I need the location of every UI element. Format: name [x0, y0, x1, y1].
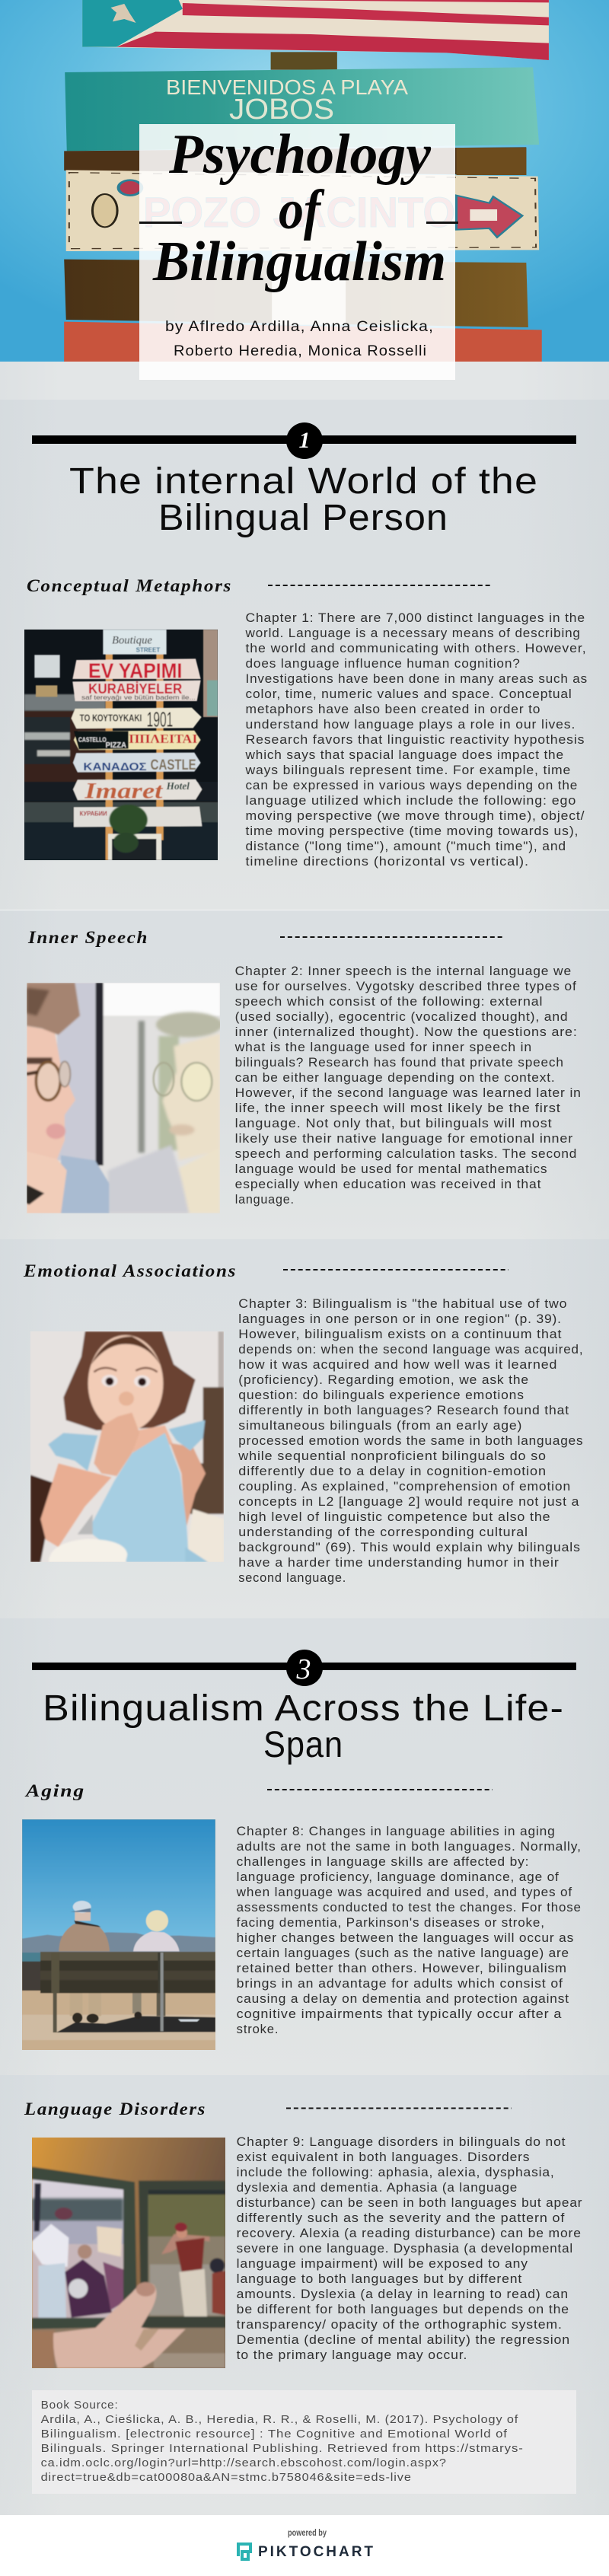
text: chapter 8: stroke. [237, 2023, 279, 2036]
text: chapter 3: concepts in L2 [language 2] would require not just a [238, 1495, 579, 1509]
icon: Piktochart logo [238, 2544, 250, 2559]
photo: stack of street signs: KURABİYELER [88, 681, 183, 697]
section 1 divider with number [32, 422, 576, 459]
icon: Puerto Rico flag sign [82, 0, 549, 60]
text: chapter 9: language impairment) will be exposed to any [237, 2257, 528, 2271]
text: chapter 2: language would be used for mental mathematics [235, 1162, 547, 1176]
text: chapter 1: time moving perspective (time moving towards us), [245, 824, 579, 838]
section 3 heading [43, 1688, 564, 1765]
photo: stack of street signs: Boutique [112, 634, 152, 646]
text: chapter 3: Chapter 3: Bilingualism is "the habitual use of two [238, 1297, 567, 1311]
text: chapter 3: languages in one person or in one region" (p. 39). [238, 1312, 562, 1326]
text: chapter 1: color, time, numeric values and space. Conceptual [245, 687, 572, 701]
text: chapter 1: ways bilinguals represent time. For example, time [244, 764, 571, 777]
text: chapter 2: what is the language used for inner speech in [234, 1041, 532, 1054]
text: chapter 9: dyslexia and dementia. Aphasia (a language [237, 2181, 518, 2195]
icon: post [271, 52, 337, 70]
text: chapter 2: use for ourselves. Vygotsky described three types of [235, 980, 577, 993]
text: chapter 2: life, the inner speech will most likely be the first [235, 1101, 561, 1115]
citation text: Bilingualism. [electronic resource] : The Cognitive and Emotional World of [41, 2428, 508, 2441]
text: chapter 2: speech which consist of the following: external [235, 995, 543, 1009]
text: chapter 2: language. Not only that, but bilinguals will most [235, 1117, 553, 1130]
text: chapter 3: question: do bilinguals experience emotions [238, 1388, 525, 1402]
title: Psychology of Bilingualism: Psychology [168, 123, 432, 186]
section 1 heading: The internal World of the [69, 461, 538, 502]
text: chapter 8: cognitive impairments that typically occur after a [237, 2007, 562, 2021]
text: chapter 3: how it was acquired and how well was it learned [238, 1358, 557, 1372]
photo: stack of street signs: КУРАБИИ [80, 809, 107, 817]
title card [139, 123, 458, 380]
section 1 heading [69, 461, 538, 538]
text: chapter 8: causing a delay on dementia and protection against [237, 1992, 569, 2006]
text: chapter 9: to the primary language may occur. [237, 2348, 467, 2362]
text: chapter 8: assessments conducted to test the changes. For those [237, 1901, 582, 1914]
photo: person and reflection in window [27, 983, 220, 1213]
text: chapter 9: Chapter 9: Language disorders in bilinguals do not [237, 2135, 566, 2149]
text: chapter 8: Chapter 8: Changes in language abilities in aging [237, 1825, 556, 1838]
text: chapter 3 [238, 1297, 583, 1585]
photo: hand holding family photo frames [32, 2138, 225, 2368]
text: chapter 9: be different for both languages but depends on the [237, 2303, 569, 2316]
text: chapter 3: (proficiency). Regarding emotion, we ask the [238, 1373, 529, 1387]
subheading: Aging: Aging [24, 1781, 85, 1800]
text: chapter 2: (used socially), egocentric (vocalized thought), and [235, 1010, 568, 1024]
footer [0, 2515, 609, 2576]
text: chapter 3: processed emotion words the same in both languages [238, 1434, 583, 1448]
text: chapter 1: the world and communicating with others. However, [245, 642, 586, 655]
photo: stack of street signs: CASTLE [151, 757, 196, 773]
section 3 heading: Bilingualism Across the Life- [43, 1688, 564, 1729]
icon: brown plank [64, 147, 526, 175]
section 1 divider with number: 1 [298, 428, 311, 453]
title: Psychology of Bilingualism: of [279, 179, 325, 241]
hero photo: painted wooden signs against blue sky: POZO JACINTO [143, 188, 455, 236]
text: chapter 1: timeline directions (horizontal vs vertical). [245, 855, 529, 869]
text: chapter 9: recovery. Alexia (a reading disturbance) can be more [237, 2227, 582, 2240]
text: chapter 1: Chapter 1: There are 7,000 distinct languages in the [245, 611, 585, 625]
text: chapter 9: language to both languages but by different [237, 2272, 522, 2286]
text: chapter 2 [234, 964, 582, 1207]
text: chapter 8: language proficiency, language dominance, age of [237, 1870, 560, 1884]
authors [165, 319, 434, 359]
photo: stack of street signs: Imaret [84, 779, 163, 804]
text: chapter 1: understand how language plays a role in our lives. [245, 718, 576, 732]
Piktochart wordmark: PIKTOCHART [258, 2544, 373, 2560]
text: chapter 9: severe in one language. Dysphasia (a developmental [237, 2242, 573, 2256]
text: chapter 8: brings in an advantage for adults which consist of [237, 1977, 563, 1991]
photo: stack of street signs: 1901 [147, 707, 173, 731]
text: chapter 8: challenges in language skills are affected by: [237, 1855, 529, 1869]
photo: stack of street signs: EV YAPIMI [88, 658, 182, 682]
text: chapter 1: can be expressed in various ways depending on the [245, 779, 578, 792]
text: chapter 9: Dementia (decline of mental ability) the regression [237, 2333, 570, 2347]
text: chapter 9: differently such as the severity and the pattern of [237, 2211, 565, 2225]
subheading: Inner Speech: Inner Speech [27, 928, 148, 947]
text: chapter 2: likely use their native language for emotional inner [235, 1132, 573, 1146]
text: chapter 8: retained better than others. However, bilingualism [237, 1962, 567, 1975]
citation text [41, 2399, 524, 2484]
title: Psychology of Bilingualism: Bilingualism [152, 231, 446, 293]
photo: stack of street signs: ΤΟ ΚΟΥΤΟΥΚΑΚΙ [80, 713, 142, 724]
citation text: ca.idm.oclc.org/login?url=http://search.ebscohost.com/login.aspx? [41, 2457, 447, 2469]
subheading: Conceptual Metaphors: Conceptual Metaphors [27, 576, 232, 595]
text: chapter 2: especially when education was received in that [235, 1178, 541, 1191]
text: chapter 3: differently due to a delay in cognition-emotion [238, 1465, 547, 1478]
text: chapter 3: background" (69). This would explain why bilinguals [238, 1541, 581, 1554]
authors: by Aflredo Ardilla, Anna Ceislicka, [165, 319, 434, 335]
citation text: Bilinguals. Springer International Publishing. Retrieved from https://stmarys- [41, 2443, 524, 2455]
title: Psychology of Bilingualism [152, 123, 446, 293]
photo: stack of street signs: ΠΠΛΕΙΤΑΙ [129, 732, 198, 746]
text: chapter 9 [237, 2135, 582, 2362]
text: chapter 9: include the following: aphasia, alexia, dysphasia, [237, 2166, 555, 2179]
text: chapter 9: transparency/ opacity of the orthographic system. [237, 2318, 563, 2332]
icon: red plank [64, 322, 542, 362]
text: chapter 8: when language was acquired and used, and types of [236, 1886, 572, 1899]
text: chapter 1: language utilized which include the following: ego [245, 794, 576, 808]
section 3 heading: Span [263, 1725, 343, 1765]
hero photo: painted wooden signs against blue sky: BIENVENIDOS A PLAYA [166, 75, 408, 99]
text: chapter 8: higher changes between the languages will occur as [237, 1931, 574, 1945]
section 1 heading: Bilingual Person [158, 498, 448, 538]
photo: stack of street signs [24, 630, 218, 860]
text: chapter 3: have a harder time understanding humor in their [238, 1556, 560, 1570]
citation text: direct=true&db=cat00080a&AN=stmc.b758046&site=eds-live [41, 2472, 412, 2484]
text: chapter 1: world. Language is a necessary means of describing [244, 626, 581, 640]
photo: stack of street signs: saf tereyağı ve bütün badem ile... [81, 694, 196, 701]
photo: surprised girl covering mouth [30, 1331, 224, 1562]
photo: stack of street signs: ΚΑΝΑΔΟΣ [83, 761, 147, 773]
subheading: Language Disorders: Language Disorders [24, 2099, 206, 2119]
text: chapter 9: exist equivalent in both languages. Disorders [237, 2150, 530, 2164]
text: chapter 1: moving perspective (we move through time), object/ [245, 809, 585, 823]
text: chapter 3: However, bilingualism exists on a continuum that [238, 1328, 562, 1341]
photo: stack of street signs: STREET [136, 646, 160, 653]
text: chapter 3: while sequential nonproficient bilinguals do so [238, 1449, 547, 1463]
text: chapter 3: differently in both languages? Research found that [238, 1404, 569, 1417]
citation text: Book Source: [41, 2399, 119, 2412]
text: chapter 3: high level of linguistic competence but also the [238, 1510, 551, 1524]
text: chapter 8: certain languages (such as the native language) are [237, 1946, 569, 1960]
photo: stack of street signs: PIZZA [106, 741, 126, 750]
section 3 divider with number [32, 1650, 576, 1686]
text: chapter 3: depends on: when the second language was acquired, [238, 1343, 583, 1357]
photo: elderly couple on bench [22, 1819, 215, 2050]
text: chapter 1: Investigations have been done in many areas such as [245, 672, 588, 686]
text: chapter 2: However, if the second language was learned later in [235, 1086, 582, 1100]
text: chapter 2: Chapter 2: Inner speech is the internal language we [235, 964, 572, 978]
text: chapter 3: coupling. As explained, "comprehension of emotion [238, 1480, 571, 1494]
powered by label: powered by [288, 2527, 327, 2538]
text: chapter 1: metaphors have also been created in order to [245, 703, 540, 716]
photo: stack of street signs: Hotel [166, 780, 190, 792]
icon: cream sign [66, 170, 539, 251]
subheading: Emotional Associations: Emotional Associations [23, 1261, 237, 1280]
text: chapter 2: can be either language depending on the context. [235, 1071, 556, 1085]
text: chapter 2: language. [235, 1193, 295, 1207]
citation text: Ardila, A., Cieślicka, A. B., Heredia, R. R., & Roselli, M. (2017). Psychology of [41, 2414, 518, 2426]
book source box [32, 2390, 576, 2494]
text: chapter 3: simultaneous bilinguals (from an early age) [238, 1419, 522, 1433]
icon: brown plank lower [64, 260, 528, 327]
hero photo: painted wooden signs against blue sky [0, 0, 609, 362]
text: chapter 8 [236, 1825, 582, 2036]
text: chapter 8: facing dementia, Parkinson's diseases or stroke, [237, 1916, 545, 1930]
text: chapter 2: inner (internalized thought). Now the questions are: [235, 1025, 578, 1039]
text: chapter 8: adults are not the same in both languages. Normally, [237, 1840, 582, 1854]
text: chapter 1: which says that spacial language does impact the [244, 748, 564, 762]
text: chapter 2: bilinguals? Research has found that private speech [235, 1056, 564, 1070]
text: chapter 3: second language. [238, 1571, 346, 1585]
text: chapter 1: does language influence human cognition? [245, 657, 521, 671]
text: chapter 1: distance ("long time"), amount ("much time"), and [245, 840, 566, 853]
text: chapter 1: Research favors that linguistic reactivity hypothesis [245, 733, 585, 747]
text: chapter 2: speech and performing calculation tasks. The second [235, 1147, 577, 1161]
icon: teal welcome sign [65, 67, 539, 151]
authors: Roberto Heredia, Monica Rosselli [174, 343, 427, 359]
text: chapter 9: disturbance) can be seen in both languages but apear [237, 2196, 582, 2210]
section 3 divider with number: 3 [295, 1653, 311, 1685]
text: chapter 9: amounts. Dyslexia (a delay in learning to read) can [237, 2287, 569, 2301]
photo: stack of street signs: CASTELLO [78, 736, 107, 743]
text: chapter 1 [244, 611, 588, 869]
text: chapter 3: understanding of the corresponding cultural [238, 1526, 528, 1539]
hero photo: painted wooden signs against blue sky: JOBOS [229, 94, 334, 126]
